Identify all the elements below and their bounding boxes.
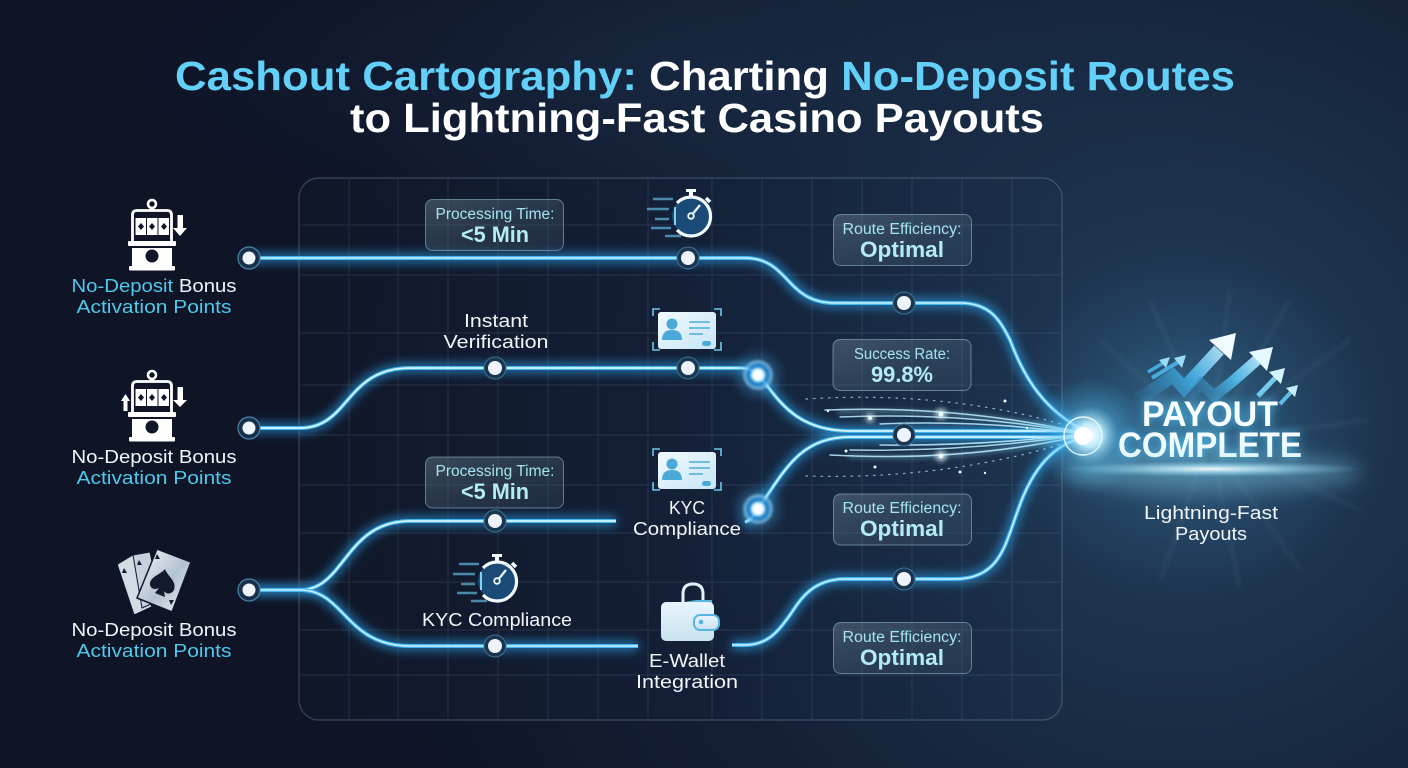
icon: id card bottom (653, 449, 721, 490)
callout: route efficiency bottom: Route Efficiency: (842, 629, 962, 646)
callout: success rate: 99.8% (871, 362, 933, 387)
route 4: bottom line (249, 438, 1083, 646)
label: kyc compliance right: KYC (669, 498, 705, 518)
heading: payout complete: PAYOUT (1142, 395, 1278, 434)
label: e-wallet integration: Integration (636, 672, 738, 692)
heading: payout complete: COMPLETE (1118, 426, 1302, 465)
callout: processing time top: <5 Min (461, 222, 529, 247)
label: source 2: No-Deposit Bonus (72, 447, 236, 467)
label: lightning-fast payouts (1144, 503, 1278, 544)
label: e-wallet integration (636, 651, 738, 692)
icon: playing cards (119, 549, 191, 613)
source 1: slot machine and label: Activation Points (76, 297, 232, 317)
label: lightning-fast payouts: Payouts (1175, 524, 1247, 544)
icon: slot machine up and down arrows (121, 371, 187, 442)
heading: payout complete (1118, 395, 1302, 465)
callout: processing time bottom: <5 Min (461, 479, 529, 504)
source 2: slot machine and label: Activation Points (76, 468, 232, 488)
icon: wallet (661, 584, 719, 641)
callout: route efficiency top (834, 214, 972, 266)
source 3: cards and label (72, 549, 236, 661)
heading: payout complete: PAYOUT (1142, 395, 1278, 434)
label: kyc compliance left: KYC Compliance (422, 610, 572, 630)
icon: stopwatch top (647, 189, 711, 236)
icon: id card top (653, 309, 721, 350)
source 2: slot machine and label (72, 371, 236, 488)
title (175, 53, 1235, 141)
label: kyc compliance right (633, 498, 741, 539)
callout: route efficiency top: Optimal (860, 237, 944, 262)
callout: route efficiency middle: Route Efficiency: (842, 500, 962, 517)
route 3: third line (249, 437, 1083, 590)
node: start points (238, 247, 260, 601)
label: source 3: No-Deposit Bonus (72, 620, 236, 640)
callout: route efficiency middle: Optimal (860, 516, 944, 541)
node: glowing junctions (736, 353, 780, 531)
callout: success rate: Success Rate: (854, 346, 950, 363)
label: instant verification: Instant (464, 311, 528, 331)
source 1: slot machine and label (72, 200, 237, 317)
route 1: top line (249, 258, 1083, 430)
label: source 1: No-Deposit Bonus (72, 276, 237, 296)
callout: success rate (833, 340, 971, 390)
callout: processing time bottom (426, 457, 564, 508)
panel: route map grid (299, 178, 1062, 720)
label: instant verification (444, 311, 548, 352)
label: lightning-fast payouts: Lightning-Fast (1144, 503, 1278, 523)
routes glow (249, 258, 1083, 646)
source 3: cards and label: Activation Points (76, 641, 232, 661)
label: kyc compliance right: Compliance (633, 519, 741, 539)
label: e-wallet integration: E-Wallet (649, 651, 725, 671)
route 2: second line (249, 368, 1083, 431)
heading: payout complete: COMPLETE (1118, 426, 1302, 465)
callout: route efficiency bottom (834, 622, 972, 674)
node: payout terminal (1032, 377, 1148, 493)
node: waypoints (484, 247, 915, 657)
speed streams converging on payout (806, 397, 1075, 476)
icon: slot machine down arrow (128, 200, 187, 270)
callout: processing time bottom: Processing Time: (436, 463, 554, 480)
title: Cashout Cartography: Charting No-Deposit Routes (175, 53, 1235, 99)
callout: route efficiency middle (834, 494, 972, 545)
label: instant verification: Verification (444, 332, 548, 352)
glowing floor (1062, 452, 1362, 492)
payout glow rays (1000, 255, 1380, 595)
icon: stopwatch bottom (453, 554, 517, 601)
callout: route efficiency top: Route Efficiency: (842, 221, 962, 238)
callout: processing time top: Processing Time: (436, 206, 554, 223)
icon: rising arrows (1135, 333, 1298, 404)
title: to Lightning-Fast Casino Payouts (350, 95, 1044, 141)
callout: processing time top (426, 200, 564, 250)
callout: route efficiency bottom: Optimal (860, 645, 944, 670)
